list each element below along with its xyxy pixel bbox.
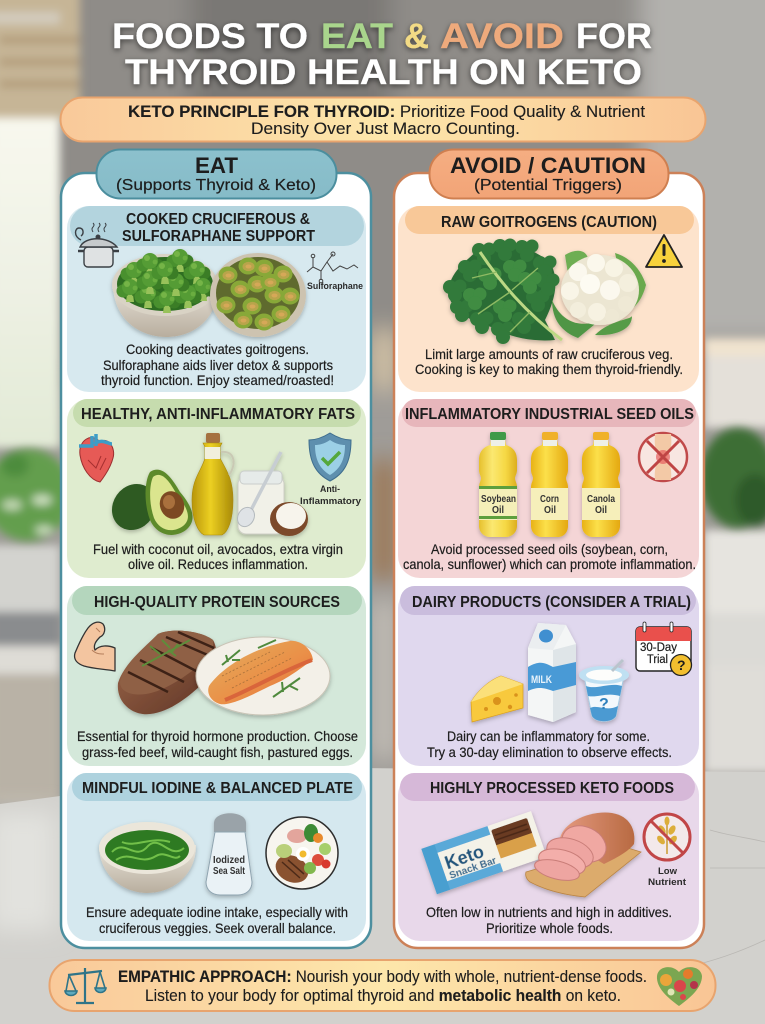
- illustration: cheese wedge: [471, 676, 523, 722]
- icon: heart of vegetables: [657, 967, 702, 1006]
- heading: processed foods: HIGHLY PROCESSED KETO FOODS: [430, 780, 674, 797]
- illustration: canola oil bottle: [582, 432, 620, 537]
- title: FOR: [576, 17, 652, 56]
- heading: cooked cruciferous: [70, 206, 364, 246]
- icon: steaming pot: [76, 223, 119, 267]
- plant right: [700, 428, 765, 528]
- illustration: keto snack bar: Keto: [442, 841, 487, 873]
- banner: keto principle: Density Over Just Macro Counting.: [251, 120, 520, 138]
- section: iodine: [67, 773, 366, 941]
- illustration: milk carton: [528, 623, 576, 722]
- text: protein description: Essential for thyroid hormone production. Choose: [77, 729, 358, 744]
- text: seed oils description: canola, sunflower) which can promote inflammation.: [403, 557, 696, 572]
- heading: iodine: MINDFUL IODINE & BALANCED PLATE: [82, 780, 353, 797]
- text: seed oils description: Avoid processed seed oils (soybean, corn,: [431, 542, 668, 557]
- illustration: milk carton: MILK: [531, 674, 552, 686]
- illustration: soybean oil bottle: [479, 432, 517, 537]
- tab: avoid: AVOID / CAUTION: [450, 153, 646, 178]
- icon: anti-inflammatory shield: [300, 433, 362, 507]
- icon: no inflammation: [639, 433, 687, 481]
- heading: raw goitrogens: RAW GOITROGENS (CAUTION): [441, 214, 657, 231]
- heading: cooked cruciferous: SULFORAPHANE SUPPORT: [122, 228, 315, 245]
- tab: avoid: (Potential Triggers): [474, 177, 622, 194]
- illustration: olive oil bottle: [192, 433, 234, 535]
- icon: 30-day trial calendar: Trial: [647, 654, 668, 666]
- panel background: eat: [61, 173, 371, 948]
- heading: seed oils: [402, 399, 696, 427]
- tab: eat: [96, 150, 336, 198]
- illustration: keto snack bar: [421, 811, 547, 894]
- tab: eat: (Supports Thyroid & Keto): [116, 177, 316, 194]
- icon: anti-inflammatory shield: Anti-: [320, 484, 340, 495]
- illustration: sliced deli loaf: [526, 813, 641, 897]
- text: protein description: [77, 729, 358, 760]
- heading: iodine: [72, 773, 362, 801]
- illustration: corn oil bottle: Oil: [544, 505, 556, 516]
- text: raw goitrogens description: Limit large amounts of raw cruciferous veg.: [425, 347, 673, 362]
- text: healthy fats description: olive oil. Reduces inflammation.: [128, 557, 308, 572]
- illustration: canola oil bottle: Oil: [595, 505, 607, 516]
- banner: empathic approach: Listen to your body for optimal thyroid and metabolic health on keto.: [145, 987, 621, 1005]
- icon: low nutrient: Nutrient: [648, 877, 687, 888]
- heading: cooked cruciferous: COOKED CRUCIFEROUS &: [126, 211, 310, 228]
- heading: healthy fats: HEALTHY, ANTI-INFLAMMATORY FATS: [81, 406, 355, 423]
- illustration: roasted sprouts bowl: [210, 253, 306, 337]
- icon: sulforaphane molecule: Sulforaphane: [307, 281, 363, 292]
- illustration: avocados: [103, 470, 193, 539]
- text: cooked cruciferous description: thyroid function. Enjoy steamed/roasted!: [101, 373, 334, 388]
- illustration: salmon plate: [196, 637, 330, 715]
- text: dairy description: Try a 30-day elimination to observe effects.: [427, 745, 672, 760]
- text: cooked cruciferous description: Sulforaphane aids liver detox & supports: [103, 358, 333, 373]
- text: processed foods description: Often low in nutrients and high in additives.: [426, 905, 672, 920]
- icon: low nutrient: Low: [658, 866, 678, 877]
- illustration: iodized sea salt shaker: Iodized: [213, 855, 245, 866]
- illustration: canola oil bottle: Canola: [587, 494, 615, 505]
- illustration: corn oil bottle: Corn: [540, 494, 559, 505]
- illustration: soybean oil bottle: Soybean: [481, 494, 516, 505]
- heading: protein: HIGH-QUALITY PROTEIN SOURCES: [94, 594, 340, 611]
- icon: sulforaphane molecule: [307, 252, 363, 292]
- title: AVOID: [440, 17, 564, 56]
- icon: low nutrient: [644, 814, 690, 888]
- text: healthy fats description: [93, 542, 343, 572]
- section: raw goitrogens: [398, 206, 699, 392]
- illustration: iodized sea salt shaker: [206, 813, 252, 895]
- section: healthy fats: [67, 399, 366, 578]
- illustration: iodized sea salt shaker: Sea Salt: [213, 866, 246, 877]
- icon: heart: [79, 434, 114, 482]
- banner: empathic approach: [50, 960, 716, 1011]
- text: healthy fats description: Fuel with coconut oil, avocados, extra virgin: [93, 542, 343, 557]
- icon: anti-inflammatory shield: Inflammatory: [300, 496, 362, 507]
- panel background: avoid: [394, 173, 704, 948]
- illustration: balanced plate: [266, 817, 338, 889]
- illustration: seaweed bowl: [99, 822, 196, 893]
- heading: dairy: DAIRY PRODUCTS (CONSIDER A TRIAL): [412, 594, 691, 611]
- text: seed oils description: [403, 542, 696, 572]
- illustration: grilled steak: [118, 631, 216, 714]
- illustration: corn oil bottle: [531, 432, 568, 537]
- left-hand kitchen: [0, 0, 80, 120]
- illustration: soybean oil bottle: Oil: [492, 505, 504, 516]
- text: cooked cruciferous description: [101, 342, 334, 388]
- title: EAT: [321, 17, 393, 56]
- tab: avoid: [430, 150, 668, 198]
- text: dairy description: [427, 729, 672, 760]
- right-hand kitchen: [704, 338, 765, 358]
- section: dairy: [398, 586, 699, 766]
- title: FOODS TO: [112, 17, 308, 56]
- illustration: coconut oil jar and spoon: [234, 452, 308, 536]
- panel: avoid: [394, 150, 704, 948]
- title: &: [404, 17, 429, 56]
- section: seed oils: [398, 399, 699, 578]
- text: processed foods description: [426, 905, 672, 936]
- text: processed foods description: Prioritize whole foods.: [486, 921, 613, 936]
- text: dairy description: Dairy can be inflammatory for some.: [447, 729, 650, 744]
- icon: warning triangle: [646, 235, 682, 267]
- panel: eat: [61, 150, 371, 948]
- icon: 30-day trial calendar: 30-Day: [640, 642, 677, 654]
- banner: keto principle: [60, 98, 706, 142]
- icon: 30-day trial calendar: [636, 622, 692, 676]
- illustration: yogurt cup: [579, 660, 629, 721]
- banner: keto principle: KETO PRINCIPLE FOR THYROID: Prioritize Food Quality & Nutrient: [128, 103, 645, 121]
- illustration: keto snack bar: Snack Bar: [448, 855, 498, 882]
- section: processed foods: [398, 773, 699, 941]
- plant left: [0, 449, 72, 541]
- title: [112, 17, 652, 92]
- text: iodine description: cruciferous veggies. Seek overall balance.: [99, 921, 336, 936]
- heading: raw goitrogens: [405, 206, 694, 234]
- text: iodine description: [86, 905, 348, 936]
- title: THYROID HEALTH ON KETO: [125, 53, 642, 92]
- illustration: kale: [443, 238, 562, 344]
- banner: empathic approach: EMPATHIC APPROACH: Nourish your body with whole, nutrient-dense foods.: [118, 968, 647, 986]
- illustration: yogurt cup: ?: [599, 696, 609, 713]
- illustration: broccoli bowl: [112, 249, 218, 337]
- text: cooked cruciferous description: Cooking deactivates goitrogens.: [126, 342, 309, 357]
- section: protein: [67, 586, 366, 766]
- tab: eat: EAT: [195, 153, 239, 178]
- icon: balance scales: [65, 968, 106, 1003]
- text: protein description: grass-fed beef, wild-caught fish, pastured eggs.: [82, 745, 353, 760]
- marble countertop: [0, 768, 765, 1024]
- text: raw goitrogens description: Cooking is key to making them thyroid-friendly.: [415, 362, 683, 377]
- heading: processed foods: [400, 773, 695, 801]
- heading: dairy: [400, 586, 696, 615]
- section: cooked cruciferous: [67, 206, 366, 392]
- illustration: cauliflower: [552, 251, 646, 338]
- heading: protein: [72, 586, 362, 615]
- heading: healthy fats: [73, 399, 361, 427]
- icon: flexed arm: [75, 622, 115, 671]
- heading: seed oils: INFLAMMATORY INDUSTRIAL SEED OILS: [405, 406, 694, 423]
- text: iodine description: Ensure adequate iodine intake, especially with: [86, 905, 348, 920]
- icon: 30-day trial calendar: ?: [677, 657, 686, 673]
- text: raw goitrogens description: [415, 347, 683, 377]
